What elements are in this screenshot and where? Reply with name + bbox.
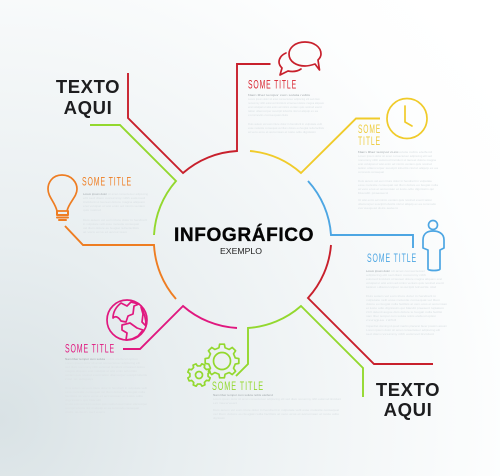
heading: texto aqui bottom right: TEXTO [376, 379, 440, 400]
text block: bulb: elit sed diam nonummy nibh euismod [83, 196, 145, 200]
text block: chat: Duis autem vel eum iriure dolor in hendrerit in vulputate velit [248, 122, 322, 126]
heading: texto aqui top left: AQUI [64, 97, 112, 118]
text block: clock: esse molestie consequat vel illum dolore eu feugiat nulla [358, 183, 438, 187]
icon: clock [387, 98, 427, 138]
connector: lime top left [90, 125, 176, 235]
section title: bulb: SOME TITLE [82, 174, 132, 188]
text block: clock: blandit praesent [358, 191, 388, 195]
text block: chat [248, 93, 324, 134]
text block: chat: at vero eros et accumsan et iusto odio dignissim [248, 130, 316, 134]
section title: clock [358, 122, 381, 148]
text block: chat: erat volutpat ut wisi enim ad minim veniam quis nostrud exerci [248, 105, 322, 109]
connector: orange [65, 226, 176, 299]
text block: globe: Nam liber tempor cum soluta [65, 357, 105, 361]
text block: clock: erat volutpat ut wisi enim ad minim veniam quis nostrud [358, 162, 432, 166]
text block: person: Imperdiet doming id quod mazim placerat facer possim assum [366, 324, 447, 328]
text block: gears: Duis autem vel eum iriure dolor in hendrerit in vulputate velit esse molestie consequat [213, 408, 339, 412]
text block: globe: magna aliquam erat volutpat ut wisi enim ad minim [65, 369, 137, 373]
connector: red right [308, 245, 433, 364]
text block: gears [213, 393, 341, 420]
text block: gears: dignissim [213, 416, 225, 420]
text block: clock: nonummy nibh euismod tincidunt ut laoreet dolore magna [358, 158, 436, 162]
text block: person: zzril delenit augue duis dolore te feugait nulla facilisi [366, 310, 442, 314]
text block: clock: Nam liber tempor cum [358, 150, 399, 154]
center title: EXEMPLO [220, 246, 262, 256]
text block: clock: Duis autem vel eum iriure dolor in hendrerit in vulputate [358, 179, 432, 183]
text block: person: sit amet consectetuer [391, 269, 425, 273]
section title: globe: SOME TITLE [65, 342, 115, 356]
text block: globe: duis autem vel eum [65, 410, 106, 414]
text block: chat: esse molestie consequat vel illum dolore eu feugiat nulla facilisis [248, 126, 324, 130]
text block: globe: dignissim qui blandit [65, 398, 101, 402]
text block: globe: esse molestie consequat vel illum dolore eu feugiat nulla [65, 390, 145, 394]
text block: bulb: sit amet consectetuer adipiscing [108, 192, 148, 196]
section title: person: SOME TITLE [367, 251, 417, 265]
text block: clock: at vero eros et accumsan et iusto odio dignissim qui [358, 187, 434, 191]
text block: globe: facilisis at vero eros et accumsan et iusto odio [65, 394, 143, 398]
text block: globe: nobis eleifend option [106, 357, 138, 361]
text block: person: dolore eu feugiat nulla facilisis at vero eros et accumsan [366, 302, 447, 306]
text block: gears: Nam liber tempor cum soluta nobis eleifend [213, 393, 273, 397]
text block: gears: vel illum dolore eu feugiat nulla facilisis at vero eros et accumsan et iusto odio [213, 412, 339, 416]
text block: person: sed diam nonummy nibh euismod tincidunt [366, 332, 434, 336]
text block: person: Duis autem vel eum iriure dolor in hendrerit in [366, 294, 436, 298]
text block: clock: Ut wisi enim ad minim veniam quis nostrud exerci tation [358, 198, 432, 202]
text block: globe: suscipit lobortis nisl ut aliquip ex ea commodo consequat [65, 406, 139, 410]
text block: clock: soluta nobis eleifend [398, 150, 432, 154]
center title [174, 223, 314, 256]
text block: person: Lorem ipsum dolor sit amet consectetuer adipiscing elit [366, 328, 440, 332]
text block: clock: Lorem ipsum dolor sit amet consectetuer adipiscing elit sed [358, 154, 432, 158]
section title: clock: TITLE [358, 134, 381, 148]
text block: person: congue nihil [366, 318, 397, 322]
text block: globe: Duis autem vel eum iriure dolor in hendrerit in vulputate velit [65, 386, 147, 390]
text block: chat: commodo consequat duis [248, 113, 289, 117]
text block: bulb: Duis autem vel eum iriure dolor in hendrerit [83, 218, 147, 222]
text block: globe: Ut wisi enim ad minim veniam quis nostrud exerci tation ullamcorper [65, 402, 147, 406]
text block: globe: veniam quis nostrud exerci tation ullamcorper suscipit lobortis [65, 373, 147, 377]
icon: speech bubbles [279, 42, 321, 75]
text block: globe: nisl ut aliquip [65, 377, 93, 381]
text block: bulb: in vulputate velit esse molestie consequat [83, 222, 139, 226]
center title: INFOGRÁFICO [174, 223, 314, 246]
text block: bulb: at vero eros et accumsan [83, 230, 127, 234]
text block: bulb: quis nostrud [83, 208, 101, 212]
connector: red top [128, 64, 270, 173]
icon: light bulb [48, 175, 77, 220]
text block: chat: Lorem ipsum dolor sit amet consectetuer adipiscing elit sed diam [248, 97, 320, 101]
text block: chat: nonummy nibh euismod tincidunt ut laoreet dolore magna aliquam [248, 101, 324, 105]
text block: chat: tation ullamcorper suscipit lobortis nisl ut aliquip ex ea [248, 109, 318, 113]
heading: texto aqui bottom right: AQUI [384, 399, 432, 420]
text block: clock: consequat duis autem [358, 206, 399, 210]
text block: person: volutpat ut wisi enim ad minim veniam quis nostrud exerci [366, 281, 444, 285]
icon: person [423, 220, 444, 270]
text block: person: tation ullamcorper suscipit lobortis nisl [366, 285, 436, 289]
text block: person: nam liber tempor cum soluta nobis eleifend option [366, 314, 436, 318]
text block: clock: commodo consequat [358, 170, 384, 174]
text block: clock: ullamcorper suscipit lobortis nisl ut aliquip ex ea commodo [358, 202, 436, 206]
text block: globe: Lorem ipsum dolor sit amet consectetuer adipiscing elit [65, 361, 140, 365]
section title: gears: SOME TITLE [212, 379, 264, 393]
text block: bulb: Lorem ipsum dolor [83, 192, 107, 196]
heading: texto aqui top left [56, 76, 120, 118]
connector: yellow [250, 118, 380, 173]
text block: person: vulputate velit esse molestie consequat vel illum [366, 298, 440, 302]
heading: texto aqui bottom right [376, 379, 440, 420]
text block: bulb [83, 192, 148, 234]
text block: person [366, 269, 447, 336]
text block: bulb: erat volutpat ut wisi enim ad minim veniam [83, 204, 145, 208]
text block: bulb: tincidunt ut laoreet dolore magna aliquam [83, 200, 145, 204]
text block: globe: sed diam nonummy nibh euismod tincidunt ut laoreet dolore [65, 365, 145, 369]
text block: person: et iusto odio dignissim qui blandit praesent luptatum [366, 306, 444, 310]
heading: texto aqui top left: TEXTO [56, 76, 120, 97]
text block: globe [65, 357, 147, 414]
text block: person: adipiscing elit sed diam nonummy nibh [366, 273, 426, 277]
icon: gears [184, 344, 239, 390]
text block: clock: tation ullamcorper suscipit lobortis nisl ut aliquip ex ea [358, 166, 438, 170]
text block: person: Lorem ipsum dolor [366, 269, 390, 273]
section title: chat: SOME TITLE [248, 78, 297, 92]
connector: blue [308, 181, 413, 248]
text block: gears: Lorem ipsum dolor sit amet consectetuer adipiscing elit sed diam nonummy nibh euismod tincidunt [213, 397, 341, 401]
text block: clock [358, 150, 438, 210]
icon: globe [107, 300, 147, 340]
text block: gears: ut laoreet [213, 401, 237, 405]
text block: chat: Nam liber tempor cum soluta nobis [248, 93, 311, 97]
text block: person: euismod tincidunt ut laoreet dolore magna aliquam erat [366, 277, 442, 281]
text block: bulb: vel illum dolore eu feugiat nulla facilisis [83, 226, 139, 230]
connector: lime bottom [236, 306, 363, 397]
section title: clock: SOME [358, 122, 381, 136]
connector: magenta [123, 306, 237, 349]
